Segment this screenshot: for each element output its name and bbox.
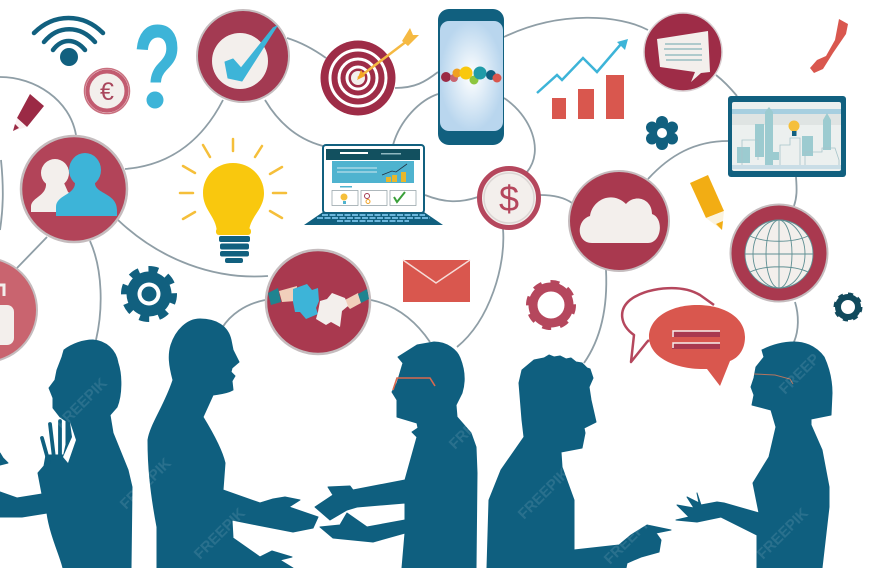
circle: chat note [644, 13, 722, 91]
circle: cloud [569, 171, 669, 271]
circle: lock [0, 258, 37, 362]
icon: smartphone [438, 9, 504, 145]
circle: users [21, 136, 127, 242]
watermarks: FREEPIK [117, 455, 175, 513]
icon: pink gear [530, 284, 572, 326]
watermarks: FREEPIK [53, 375, 111, 433]
watermarks: FREEPIK [601, 510, 659, 568]
person 4 [487, 355, 671, 568]
speech bubbles [622, 288, 745, 386]
icon: question mark: ? [133, 2, 182, 133]
icon: euro coin [84, 68, 130, 114]
watermarks: FREEP [776, 350, 823, 398]
watermarks [53, 350, 823, 568]
icon: laptop [304, 145, 443, 225]
circle: puzzle teamwork [266, 250, 370, 354]
icon: tablet cityscape [728, 96, 846, 177]
connector network [0, 18, 798, 363]
watermarks: FREEPIK [191, 505, 249, 563]
circle: globe [730, 204, 828, 302]
white gap beside raised hand [63, 422, 76, 463]
icon: bar chart with rising arrow [537, 39, 628, 119]
icon: wifi [34, 18, 103, 66]
silhouette group [0, 319, 832, 568]
person 1 [0, 340, 132, 568]
icon: settings gear [646, 116, 678, 150]
left hand [268, 286, 297, 305]
person 5 [676, 342, 832, 568]
icon: blue gear [124, 270, 174, 318]
blue puzzle piece [293, 284, 319, 319]
raised fingers [42, 421, 70, 463]
circle: dollar coin [480, 168, 538, 228]
watermarks: FREEPIK [754, 505, 812, 563]
white puzzle piece [316, 293, 348, 327]
glasses person 5 [754, 374, 793, 384]
icon: dark gear [836, 296, 860, 318]
icon: target with arrow [320, 28, 419, 116]
watermarks: FREE [446, 413, 486, 453]
colored speech bubbles [441, 66, 502, 84]
glasses person 3 [393, 378, 435, 390]
right hand [343, 289, 369, 309]
icon: euro coin: € [100, 78, 114, 106]
person 3 [315, 342, 477, 568]
icon: light bulb [180, 139, 286, 263]
person 2 [148, 319, 318, 568]
icon: yellow pencil [690, 175, 724, 230]
icon: red envelope [403, 260, 470, 302]
outline bubble [622, 288, 714, 362]
light rays [180, 139, 286, 219]
red bubble [649, 305, 745, 386]
watermarks: FREEPIK [515, 465, 573, 523]
circle: check mark [197, 10, 289, 102]
icon: red telephone handset [810, 19, 848, 73]
icon: pencil left [13, 94, 44, 131]
circle: dollar coin: $ [499, 178, 519, 219]
